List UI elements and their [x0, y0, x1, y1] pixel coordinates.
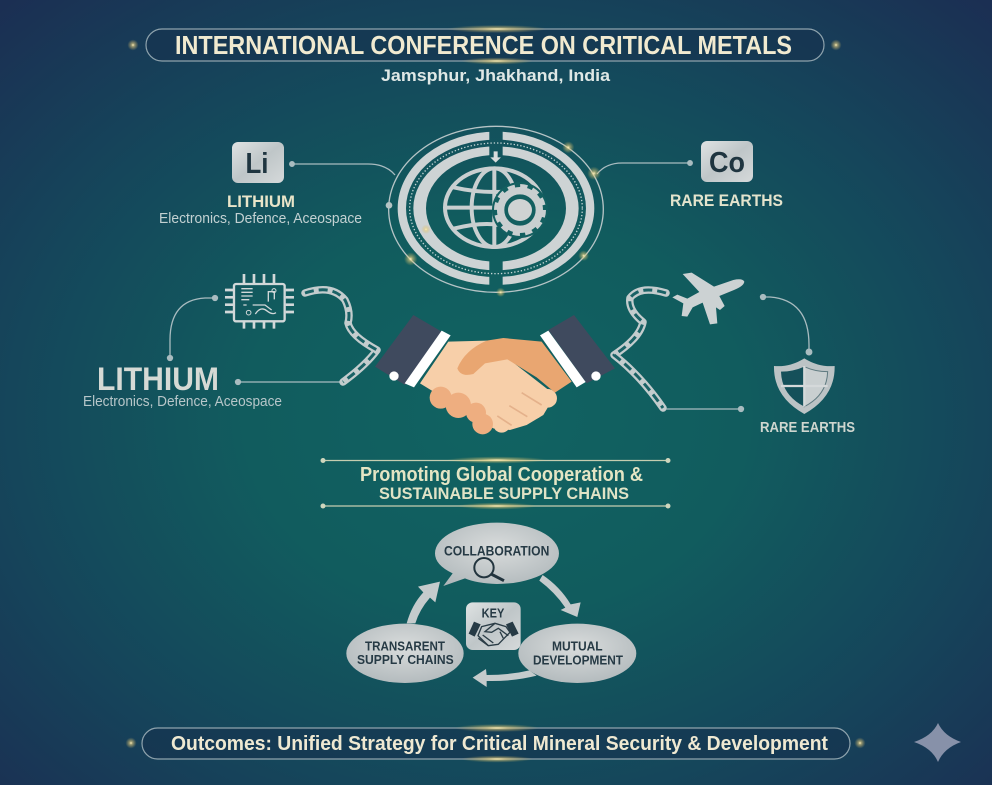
left sleeve: [375, 315, 442, 385]
light hand: [420, 341, 556, 430]
label: rare earths: RARE EARTHS: [670, 192, 783, 210]
connector: chain to rare earths: [666, 406, 744, 412]
connector: plane to shield: [760, 294, 812, 355]
connector: rare earths to globe: [597, 161, 692, 174]
cooperation banner: [320, 456, 670, 510]
icon: four-point star: [914, 723, 961, 762]
element card: rare earths: Co: [709, 147, 745, 179]
outcomes text: Outcomes: Unified Strategy for Critical Mineral Security & Development: [171, 732, 828, 755]
bubble: development: DEVELOPMENT: [533, 652, 623, 667]
thick rings: [398, 132, 594, 285]
central globe emblem: [386, 126, 603, 297]
node lights: [386, 141, 601, 297]
outer thin ring: [389, 126, 603, 292]
cuff buttons: [389, 371, 601, 381]
element card: rare earths: [597, 141, 783, 210]
key box: [466, 602, 521, 650]
chain left: [305, 290, 377, 382]
orange hand: [457, 338, 572, 393]
bubble: development: [518, 624, 636, 683]
title banner: [128, 25, 842, 64]
bubble: supply chains: [346, 624, 464, 683]
orange fingers: [430, 387, 493, 434]
key box: KEY: [482, 606, 504, 621]
banner line two: SUSTAINABLE SUPPLY CHAINS: [379, 485, 629, 503]
banner line one: Promoting Global Cooperation &: [360, 464, 643, 486]
title: INTERNATIONAL CONFERENCE ON CRITICAL METALS: [175, 32, 792, 60]
element card: lithium: [159, 142, 395, 227]
left cuff: [405, 331, 451, 387]
big label: lithium: LITHIUM: [97, 361, 219, 397]
dotted ring: [410, 143, 582, 274]
bubble: supply chains: SUPPLY CHAINS: [357, 652, 454, 667]
gear: [492, 182, 548, 238]
arrow: development to supply chains: [473, 669, 537, 687]
icon: handshake: [375, 315, 615, 434]
chain right: [614, 290, 666, 408]
bubble: supply chains: TRANSARENT: [365, 638, 445, 653]
bubble: collaboration: COLLABORATION: [444, 543, 549, 559]
label: lithium: LITHIUM: [227, 192, 295, 211]
arrow: supply chains to collaboration: [407, 582, 440, 623]
uses: lithium: Electronics, Defence, Aceospace: [159, 211, 362, 227]
arrow: collaboration to development: [539, 575, 581, 617]
icon: shield: [774, 358, 835, 414]
arrow into globe: [490, 151, 501, 163]
icon: circuit chip: [225, 274, 294, 329]
connector: lithium to chain: [236, 380, 340, 384]
outcomes banner: [126, 724, 866, 762]
icon: small handshake: [469, 622, 519, 646]
label: rare earths lower: RARE EARTHS: [760, 419, 855, 436]
right sleeve: [548, 315, 615, 383]
bubble: collaboration: [435, 523, 559, 586]
connector: lithium to globe: [290, 162, 395, 175]
icon: magnifying glass: [474, 558, 504, 581]
uses: lithium lower: Electronics, Defence, Aceospace: [83, 394, 282, 410]
finger lines: [497, 393, 542, 425]
bubble: development: MUTUAL: [552, 638, 603, 653]
icon: airplane: [672, 273, 744, 324]
connector: chip to lithium: [168, 296, 218, 360]
collaboration cycle diagram: [346, 523, 636, 687]
right chain group: [614, 273, 855, 436]
left chain group: [83, 274, 377, 410]
element card: lithium: Li: [246, 148, 268, 180]
light fingers: [493, 389, 557, 433]
right cuff: [540, 331, 586, 387]
globe: [445, 168, 544, 247]
subtitle: location: Jamsphur, Jhakhand, India: [381, 66, 611, 85]
